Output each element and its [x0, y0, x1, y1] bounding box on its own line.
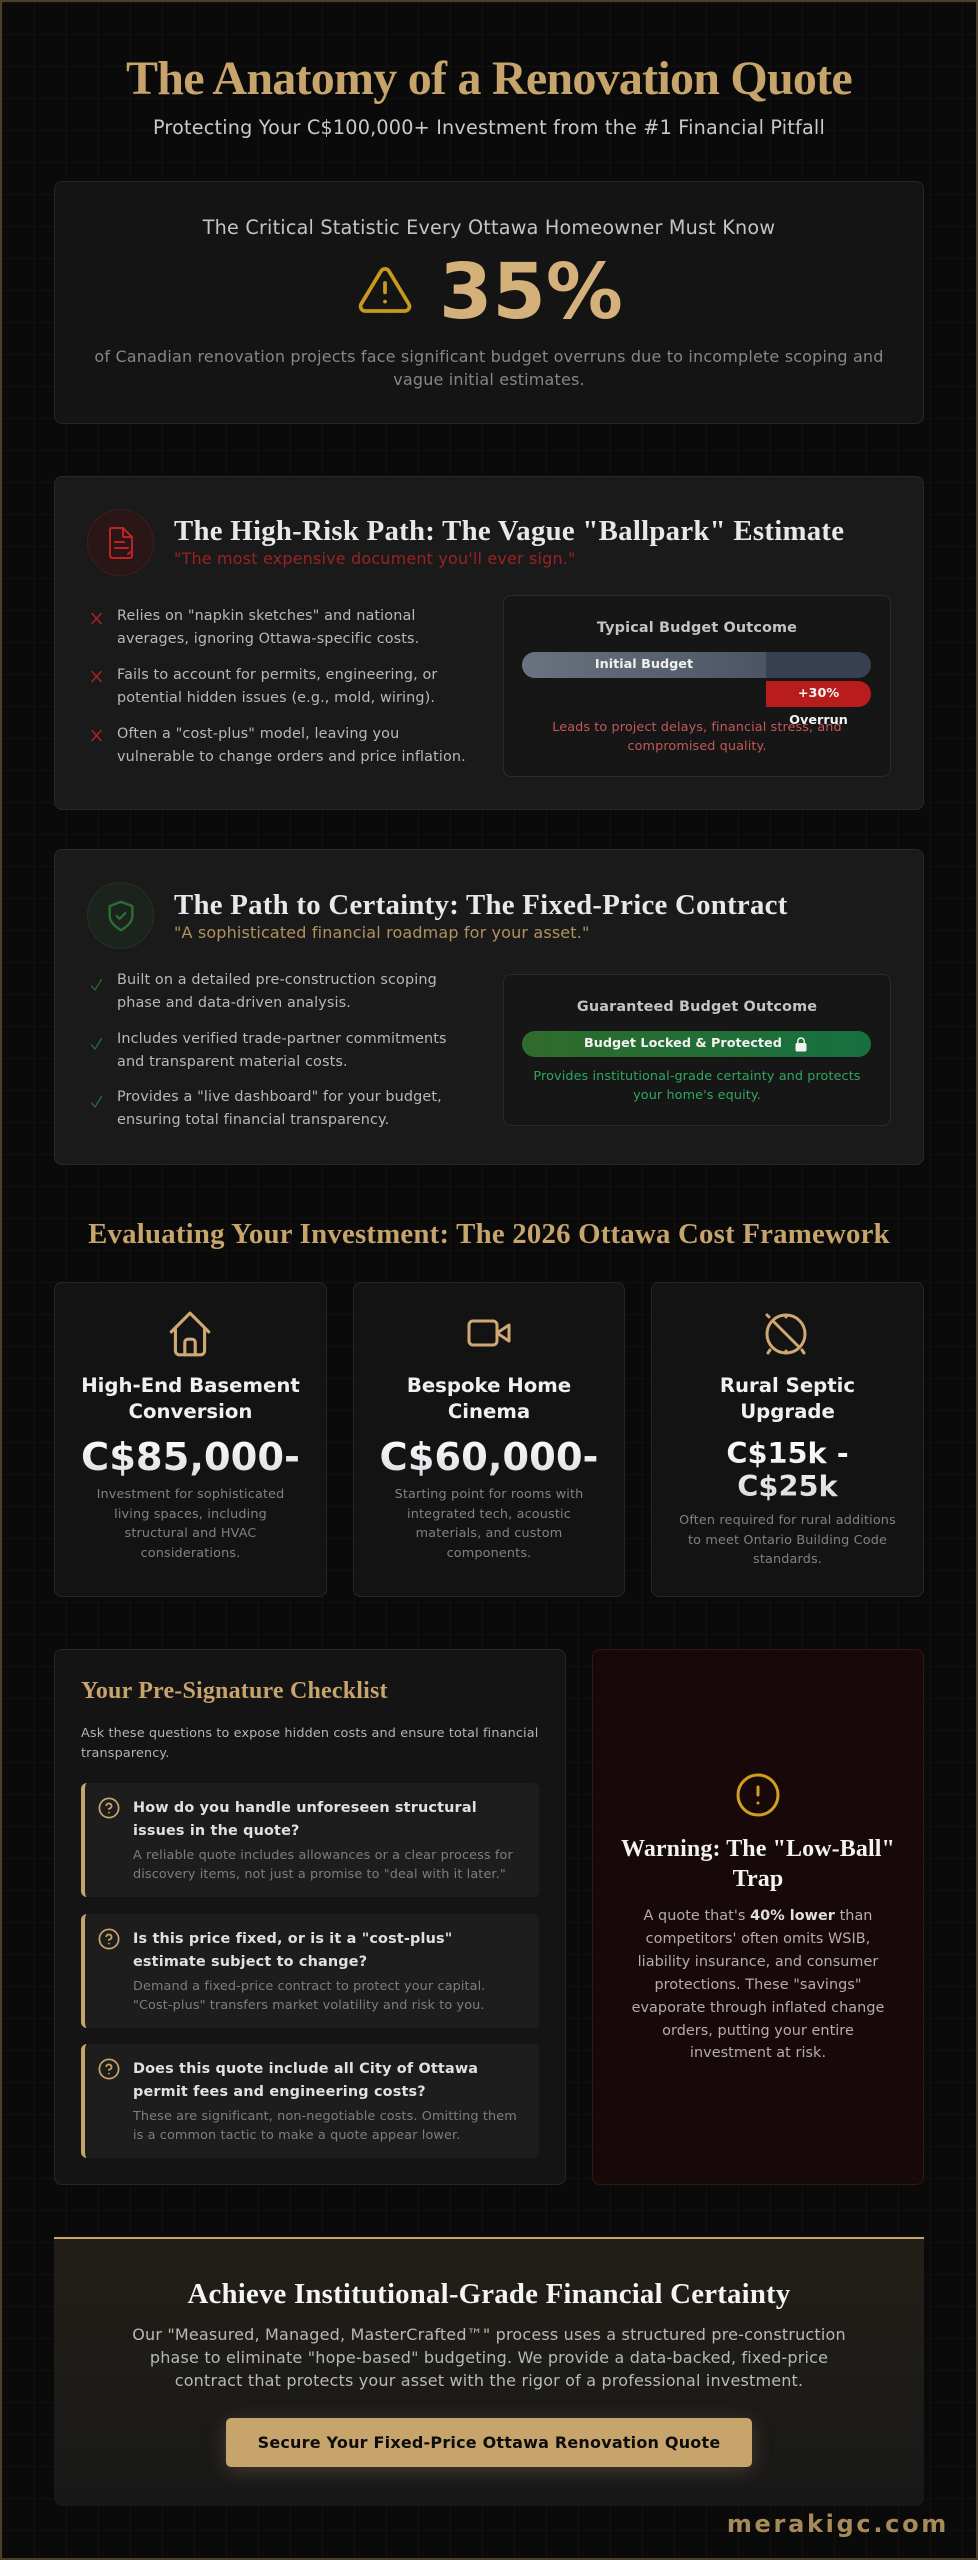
- checklist title: Your Pre-Signature Checklist: [81, 1678, 388, 1704]
- bullet text: vulnerable to change orders and price inflation.: [117, 748, 466, 764]
- icon: video camera: [468, 1320, 510, 1346]
- card description: [395, 1487, 583, 1560]
- question text: issues in the quote?: [133, 1823, 300, 1839]
- icon: question: [98, 2058, 120, 2080]
- chart caption: compromised quality.: [627, 739, 767, 754]
- statistic description: [94, 347, 884, 389]
- bar: full track: [522, 652, 871, 678]
- statistic description: of Canadian renovation projects face significant budget overruns due to incomplete scoping and: [94, 347, 884, 366]
- card title: Cinema: [448, 1400, 530, 1423]
- card description: [679, 1513, 896, 1567]
- answer text: [133, 1848, 513, 1882]
- icon: x mark: [91, 612, 102, 624]
- chart: typical budget outcome: [503, 595, 891, 777]
- icon: house: [170, 1312, 210, 1356]
- bullet text: Built on a detailed pre-construction scoping: [117, 972, 437, 988]
- card description: Often required for rural additions: [679, 1513, 896, 1528]
- answer text: [133, 1979, 485, 2013]
- question text: [133, 1931, 452, 1970]
- card description: integrated tech, acoustic: [407, 1506, 571, 1522]
- question text: How do you handle unforeseen structural: [133, 1800, 477, 1816]
- bar label: Budget Locked & Protected: [584, 1036, 782, 1051]
- bullet text: Includes verified trade-partner commitments: [117, 1030, 447, 1046]
- panel: home cinema cost card: [353, 1282, 625, 1597]
- checklist intro: transparency.: [81, 1746, 170, 1761]
- checklist intro: Ask these questions to expose hidden costs and ensure total financial: [81, 1726, 538, 1741]
- icon: question: [98, 1928, 120, 1950]
- bullet text: and transparent material costs.: [117, 1054, 348, 1070]
- question text: Does this quote include all City of Ottawa: [133, 2061, 478, 2077]
- high-risk quote: "The most expensive document you'll ever sign.": [174, 549, 576, 568]
- card title: Bespoke Home: [407, 1374, 571, 1397]
- panel: basement cost card: [54, 1282, 327, 1597]
- bullet text: Fails to account for permits, engineering, or: [117, 666, 437, 682]
- chart title: Typical Budget Outcome: [597, 620, 797, 636]
- answer text: These are significant, non-negotiable costs. Omitting them: [133, 2109, 517, 2124]
- cta text: [54, 2324, 924, 2393]
- question text: [133, 1800, 477, 1839]
- card title: [720, 1374, 855, 1423]
- icon: risky document: [87, 509, 154, 576]
- chart title: Guaranteed Budget Outcome: [577, 999, 817, 1015]
- bullet text: [117, 666, 438, 706]
- question text: Is this price fixed, or is it a "cost-plus": [133, 1931, 452, 1947]
- card title: High-End Basement: [81, 1374, 300, 1397]
- bar: overrun: +30%: [798, 686, 839, 701]
- certainty bullet list: [90, 972, 447, 1128]
- high-risk heading group: [87, 509, 844, 576]
- cta text: Our "Measured, Managed, MasterCrafted™" process uses a structured pre-construction: [132, 2325, 846, 2344]
- cta title: Achieve Institutional-Grade Financial Certainty: [187, 2278, 791, 2310]
- bullet text: averages, ignoring Ottawa-specific costs.: [117, 631, 419, 647]
- high-risk bullet list: [91, 608, 466, 764]
- brand footer: merakigc.com: [727, 2510, 949, 2538]
- statistic number: 35%: [439, 248, 623, 337]
- panel: low-ball warning: [592, 1649, 924, 2185]
- bullet text: [117, 726, 466, 764]
- chart caption: [533, 1069, 861, 1103]
- overrun label: Overrun: [789, 713, 848, 728]
- bullet text: [117, 1089, 442, 1128]
- warning title: [593, 1834, 923, 1894]
- certainty heading group: [87, 882, 788, 949]
- bullet text: potential hidden issues (e.g., mold, wiring).: [117, 690, 435, 706]
- card price: [652, 1437, 923, 1503]
- bar: initial budget: [522, 652, 766, 678]
- card description: structural and HVAC: [125, 1526, 256, 1541]
- bullet text: Provides a "live dashboard" for your budget,: [117, 1089, 442, 1105]
- icon: check mark: [90, 979, 102, 991]
- card description: living spaces, including: [114, 1506, 267, 1522]
- bullet text: Often a "cost-plus" model, leaving you: [117, 726, 399, 742]
- answer text: "Cost-plus" transfers market volatility and risk to you.: [133, 1998, 485, 2013]
- chart caption: Provides institutional-grade certainty and protects: [533, 1069, 861, 1084]
- checklist item 2: [81, 1914, 539, 2028]
- section heading: cost framework: Evaluating Your Investment: The 2026 Ottawa Cost Framework: [88, 1218, 890, 1250]
- card price: C$15k -: [726, 1436, 849, 1470]
- certainty quote: "A sophisticated financial roadmap for your asset.": [174, 923, 589, 942]
- answer text: discovery items, not just a promise to "deal with it later.": [133, 1867, 506, 1882]
- card title: Rural Septic: [720, 1374, 855, 1397]
- bullet text: phase and data-driven analysis.: [117, 995, 351, 1011]
- cta text: phase to eliminate "hope-based" budgeting. We provide a data-backed, fixed-price: [150, 2348, 828, 2367]
- card description: materials, and custom: [416, 1526, 562, 1541]
- card price: C$85,000-: [81, 1435, 300, 1480]
- question text: permit fees and engineering costs?: [133, 2084, 426, 2100]
- bar: budget locked: [522, 1031, 871, 1057]
- chart caption: [552, 720, 842, 754]
- warning text: orders, putting your entire: [662, 2023, 854, 2039]
- answer text: A reliable quote includes allowances or a clear process for: [133, 1848, 513, 1863]
- card description: considerations.: [141, 1546, 240, 1560]
- card description: Investment for sophisticated: [97, 1487, 284, 1502]
- statistic heading: The Critical Statistic Every Ottawa Homeowner Must Know: [203, 216, 775, 239]
- question text: estimate subject to change?: [133, 1954, 367, 1970]
- checklist item 1: [81, 1783, 539, 1897]
- card description: standards.: [753, 1552, 822, 1567]
- answer text: is a common tactic to make a quote appear lower.: [133, 2128, 460, 2143]
- panel: call to action: [54, 2237, 924, 2506]
- warning text: liability insurance, and consumer: [638, 1954, 878, 1970]
- warning text: investment at risk.: [690, 2045, 826, 2061]
- icon: warning triangle: [358, 267, 412, 313]
- icon: shield check: [87, 882, 154, 949]
- question text: [133, 2058, 478, 2104]
- bar: overrun: [766, 681, 871, 707]
- icon: question: [98, 1798, 120, 1818]
- chart caption: your home's equity.: [633, 1088, 761, 1103]
- cta button: Secure Your Fixed-Price Ottawa Renovation Quote: [258, 2433, 720, 2452]
- cta button: [226, 2418, 752, 2467]
- icon: x mark: [91, 730, 102, 742]
- bullet text: ensuring total financial transparency.: [117, 1112, 389, 1128]
- checklist intro: [81, 1726, 538, 1761]
- card price: C$25k: [737, 1469, 838, 1503]
- chart caption: Leads to project delays, financial stress, and: [552, 720, 842, 735]
- panel: critical statistic: [54, 181, 924, 424]
- card title: [81, 1374, 300, 1423]
- icon: check mark: [90, 1096, 102, 1108]
- icon: lock: [796, 1037, 806, 1052]
- header: [126, 52, 852, 139]
- card description: components.: [447, 1546, 531, 1560]
- answer text: [133, 2107, 517, 2145]
- cta text: contract that protects your asset with the rigor of a professional investment.: [175, 2371, 803, 2390]
- card title: [407, 1374, 571, 1423]
- bullet text: [117, 972, 437, 1011]
- panel: path to certainty: [54, 849, 924, 1165]
- warning text: protections. These "savings": [654, 1977, 862, 1993]
- card description: Starting point for rooms with: [395, 1487, 583, 1502]
- icon: alert circle: [734, 1771, 782, 1819]
- icon: septic: [765, 1313, 806, 1355]
- bullet text: [117, 608, 419, 647]
- checklist item 3: [81, 2044, 539, 2158]
- checklist content: [81, 1678, 538, 1761]
- card title: Conversion: [129, 1400, 252, 1423]
- answer text: Demand a fixed-price contract to protect your capital.: [133, 1979, 485, 1994]
- warning text: competitors' often omits WSIB,: [646, 1931, 870, 1947]
- subtitle: Protecting Your C$100,000+ Investment from the #1 Financial Pitfall: [153, 116, 825, 139]
- card price: C$60,000-: [380, 1435, 598, 1480]
- high-risk title: The High-Risk Path: The Vague "Ballpark" Estimate: [174, 515, 844, 547]
- bullet text: Relies on "napkin sketches" and national: [117, 608, 416, 624]
- card description: [97, 1487, 284, 1560]
- card description: to meet Ontario Building Code: [688, 1532, 887, 1548]
- chart: guaranteed budget outcome: [503, 974, 891, 1126]
- certainty title: The Path to Certainty: The Fixed-Price Contract: [174, 889, 788, 921]
- warning text: evaporate through inflated change: [632, 2000, 884, 2016]
- icon: x mark: [91, 670, 102, 682]
- panel: high-risk path: [54, 476, 924, 810]
- warning title: Warning: The "Low-Ball": [621, 1836, 895, 1862]
- warning text: [593, 1905, 923, 2065]
- warning text: A quote that's 40% lower than: [644, 1908, 872, 1924]
- title: The Anatomy of a Renovation Quote: [126, 52, 852, 105]
- icon: check mark: [90, 1038, 102, 1050]
- statistic description: vague initial estimates.: [393, 370, 585, 389]
- bar: initial budget: Initial Budget: [595, 657, 693, 672]
- panel: pre-signature checklist: [54, 1649, 566, 2185]
- card title: Upgrade: [740, 1400, 835, 1423]
- warning title: Trap: [733, 1866, 783, 1892]
- bullet text: [117, 1030, 447, 1070]
- panel: septic cost card: [651, 1282, 924, 1597]
